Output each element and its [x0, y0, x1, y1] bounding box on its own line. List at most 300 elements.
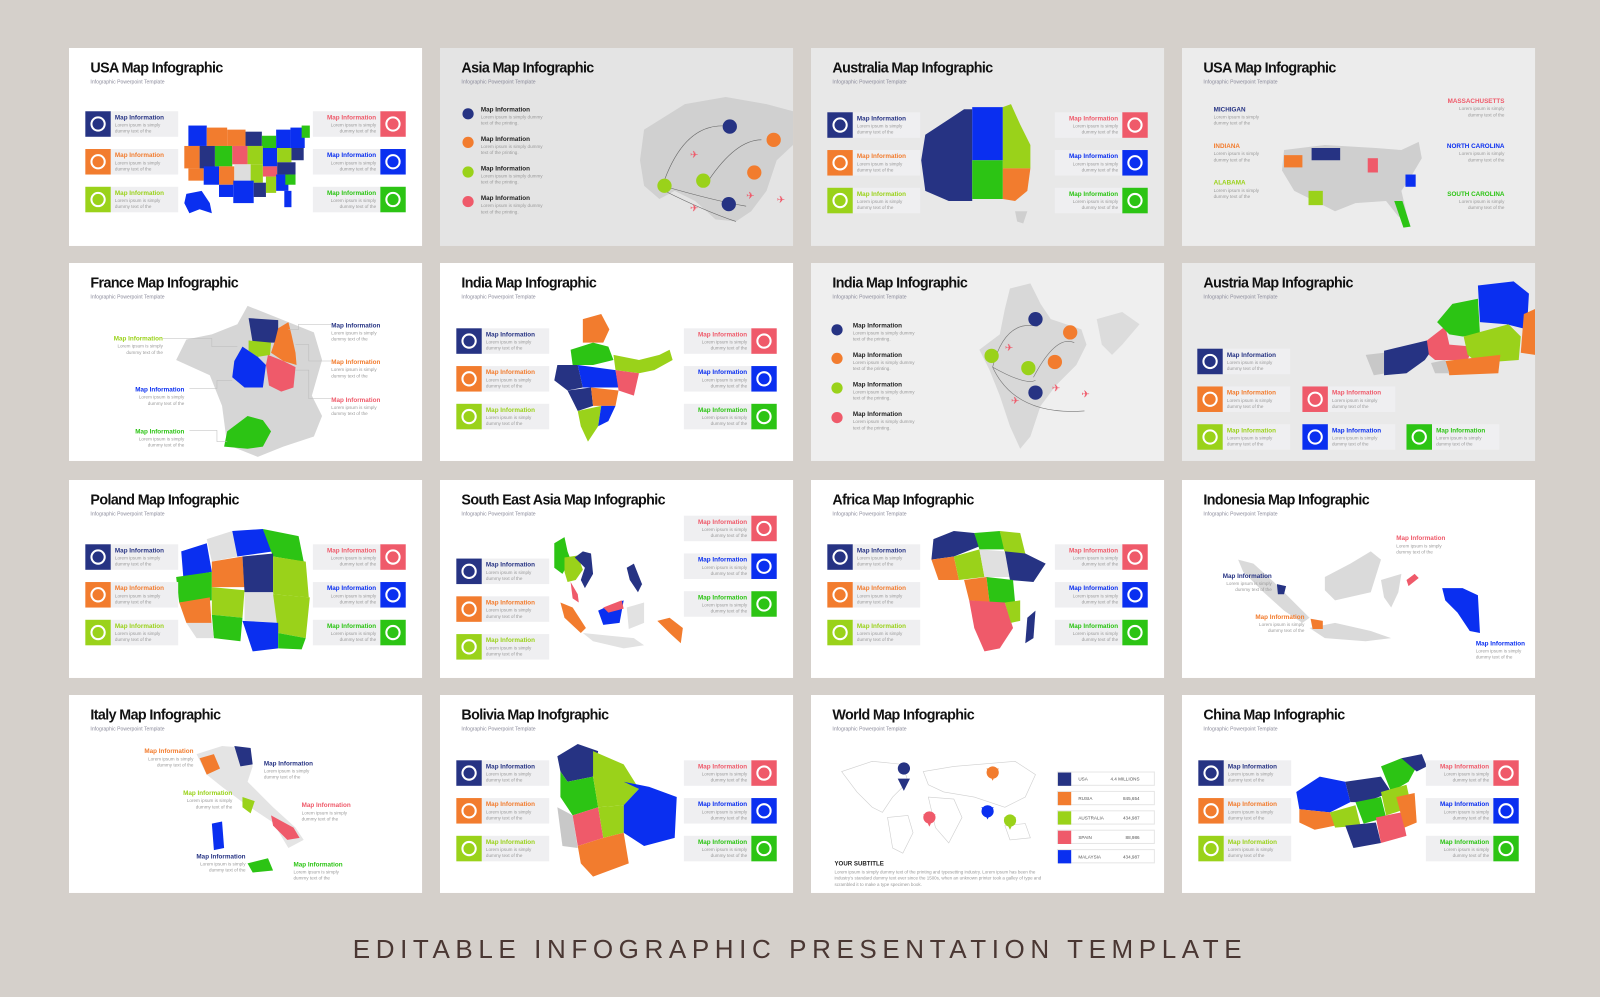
- card: Italy map infographic: Map Information: [293, 861, 343, 868]
- card: South East Asia map infographic: Map Information: [486, 562, 535, 569]
- data table: 4.4 MILLIONS: [1110, 777, 1140, 782]
- card: Australia map infographic: Map Information: [857, 115, 906, 122]
- card: Indonesia map infographic: Map Information: [1476, 640, 1525, 647]
- card: USA states map infographic: MICHIGAN: [1214, 106, 1246, 113]
- card: USA map infographic: Map Information: [327, 190, 376, 197]
- card: India routes infographic: Map Information: [853, 322, 902, 329]
- card: Africa map infographic: dummy text of the: [1082, 561, 1118, 566]
- card: France map infographic: dummy text of the: [148, 442, 184, 447]
- subtitle text block: Lorem ipsum is simply dummy text of the printing and typesetting industry. Lorem ipsum has been the industry's standard dummy text ever since the 1500s, when an unknown printer took a galley of type and scrambled it to make a type specimen book.: [834, 869, 1041, 887]
- card: Bolivia map infographic: Map Information: [698, 801, 747, 808]
- card: Indonesia map infographic: dummy text of the: [1268, 627, 1304, 633]
- info boxes left: [456, 760, 549, 862]
- card: South East Asia map infographic: Lorem ipsum is simply: [702, 565, 747, 570]
- card: South East Asia map infographic: dummy text of the: [711, 533, 747, 538]
- card: India map infographic: dummy text of the: [486, 345, 522, 350]
- card: South East Asia map infographic: Lorem ipsum is simply: [702, 602, 747, 608]
- card: South East Asia map infographic: Map Information: [698, 519, 747, 526]
- map: Asia with routes: ✈: [746, 191, 755, 202]
- info list: [831, 322, 915, 430]
- card: India map infographic: Lorem ipsum is simply: [486, 340, 531, 345]
- card: Africa map infographic: Map Information: [1069, 547, 1118, 554]
- card: Indonesia map infographic: dummy text of the: [1235, 587, 1272, 592]
- card: Italy map infographic: Map Information: [264, 760, 313, 767]
- map: South East Asia: [554, 537, 683, 648]
- card: Africa map infographic: Lorem ipsum is simply: [857, 556, 902, 561]
- card: USA map infographic: dummy text of the: [340, 166, 376, 171]
- card: Indonesia map infographic: Map Information: [1255, 614, 1304, 621]
- card: France map infographic: Lorem ipsum is simply: [331, 330, 377, 335]
- subtitle: Infographic Powerpoint Template: [90, 80, 165, 86]
- card: South East Asia map infographic: Lorem ipsum is simply: [702, 527, 747, 532]
- subtitle: Infographic Powerpoint Template: [461, 295, 536, 301]
- card: Australia map infographic: dummy text of the: [857, 167, 893, 172]
- subtitle: Infographic Powerpoint Template: [90, 512, 165, 518]
- card: India map infographic: dummy text of the: [711, 421, 747, 426]
- subtitle: Infographic Powerpoint Template: [832, 295, 907, 301]
- card: India map infographic: dummy text of the: [711, 383, 747, 388]
- labels: [144, 748, 351, 880]
- info boxes left: [827, 544, 920, 646]
- map: Austria: [1366, 281, 1535, 376]
- card: Poland map infographic: dummy text of the: [115, 637, 151, 642]
- card: France map infographic: Lorem ipsum is simply: [331, 367, 377, 372]
- card: Africa map infographic: Lorem ipsum is simply: [1073, 593, 1118, 598]
- info boxes left: [85, 111, 178, 212]
- map: Bolivia: [557, 744, 677, 877]
- subtitle: Infographic Powerpoint Template: [832, 80, 907, 86]
- subtitle: Infographic Powerpoint Template: [461, 80, 536, 86]
- card: Bolivia map infographic: [440, 695, 793, 893]
- card: Africa map infographic: Map Information: [857, 585, 906, 592]
- card: Asia map infographic: Lorem ipsum is simply dummy: [481, 114, 543, 119]
- card: Bolivia map infographic: Map Information: [486, 839, 535, 846]
- title: World Map Infographic: [832, 706, 974, 723]
- card: Poland map infographic: Lorem ipsum is simply: [115, 556, 160, 561]
- card: Italy map infographic: Lorem ipsum is simply: [148, 756, 193, 761]
- card: India map infographic: Lorem ipsum is simply: [486, 377, 531, 382]
- data table: 845,654: [1123, 796, 1140, 801]
- map: India gray with routes: ✈: [1081, 390, 1090, 401]
- map: France: [163, 306, 332, 457]
- card: USA states map infographic: dummy text of the: [1214, 120, 1250, 125]
- card: Africa map infographic: dummy text of the: [857, 561, 893, 566]
- card: USA map infographic: Lorem ipsum is simply: [331, 122, 376, 128]
- card: Poland map infographic: Map Information: [327, 585, 376, 592]
- card: India map infographic: dummy text of the: [486, 421, 522, 426]
- card: France map infographic: Map Information: [331, 397, 380, 404]
- card: Australia map infographic: Map Information: [857, 191, 906, 198]
- card: USA map infographic: Map Information: [115, 152, 164, 159]
- card: USA states map infographic: Lorem ipsum is simply: [1214, 188, 1259, 193]
- card: World map infographic: [811, 695, 1164, 893]
- card: Austria map infographic: Map Information: [1227, 352, 1276, 359]
- card: Italy map infographic: Lorem ipsum is simply: [293, 869, 339, 875]
- card: France map infographic: dummy text of the: [148, 400, 184, 405]
- map: world outline with pins: [841, 761, 1036, 854]
- info boxes grid: [1197, 348, 1485, 450]
- card: China map infographic: dummy text of the: [1228, 853, 1264, 858]
- card: Italy map infographic: Map Information: [302, 802, 351, 809]
- map: Asia with routes: ✈: [777, 195, 785, 206]
- info boxes right: [684, 760, 777, 862]
- title: Australia Map Infographic: [832, 59, 993, 76]
- card: Poland map infographic: Map Information: [115, 623, 164, 630]
- card: France map infographic: Map Information: [135, 386, 184, 394]
- card: Africa map infographic: dummy text of the: [1082, 637, 1118, 642]
- card: France map infographic: [69, 263, 422, 461]
- card: Indonesia map infographic: Lorem ipsum is simply: [1259, 622, 1304, 627]
- card: Poland map infographic: Map Information: [115, 585, 164, 592]
- card: India map infographic: Lorem ipsum is simply: [486, 415, 531, 420]
- card: India routes infographic: Map Information: [853, 381, 902, 389]
- card: USA map infographic: Lorem ipsum is simply: [115, 198, 160, 203]
- card: China map infographic: Map Information: [1440, 763, 1489, 771]
- info boxes right: [1182, 694, 1535, 696]
- card: India map infographic: dummy text of the: [711, 345, 747, 350]
- card: India routes infographic: text of the printing.: [853, 425, 891, 430]
- labels right: [1447, 98, 1504, 210]
- card: India map infographic: Map Information: [698, 331, 747, 339]
- card: South East Asia map infographic: dummy text of the: [711, 608, 747, 613]
- card: France map infographic: Map Information: [114, 335, 163, 343]
- card: USA map infographic: dummy text of the: [340, 204, 376, 209]
- card: Italy map infographic: Map Information: [183, 790, 232, 797]
- card: USA map infographic: Lorem ipsum is simply: [115, 160, 160, 165]
- card: Asia map infographic: Map Information: [481, 195, 530, 202]
- title: South East Asia Map Infographic: [461, 491, 665, 508]
- card: China map infographic: Lorem ipsum is simply: [1444, 772, 1489, 777]
- card: China map infographic: dummy text of the: [1228, 777, 1264, 782]
- map: India gray with routes: [980, 284, 1140, 448]
- card: USA map infographic: dummy text of the: [115, 128, 151, 133]
- footer caption: EDITABLE INFOGRAPHIC PRESENTATION TEMPLATE: [353, 934, 1247, 964]
- card: India map infographic: Map Information: [698, 407, 747, 414]
- card: Poland map infographic: Map Information: [115, 547, 164, 554]
- data table: USA: [1078, 777, 1088, 782]
- card: Africa map infographic: Map Information: [857, 623, 906, 630]
- card: Italy map infographic: Map Information: [196, 853, 246, 860]
- map: Italy: [196, 746, 304, 872]
- card: India routes infographic: text of the printing.: [853, 395, 891, 400]
- card: USA map infographic: Lorem ipsum is simply: [115, 122, 160, 128]
- subtitle: Infographic Powerpoint Template: [1203, 80, 1278, 86]
- card: Africa map infographic: Lorem ipsum is simply: [1073, 631, 1118, 636]
- card: South East Asia map infographic: Lorem ipsum is simply: [486, 608, 531, 613]
- card: Australia map infographic: Map Information: [1069, 115, 1118, 122]
- card: Austria map infographic: dummy text of the: [1227, 366, 1263, 371]
- card: Austria map infographic: Lorem ipsum is simply: [1332, 435, 1377, 441]
- card: USA map infographic: Map Information: [115, 114, 164, 121]
- card: South East Asia map infographic: Lorem ipsum is simply: [486, 645, 531, 650]
- card: Asia map infographic: Lorem ipsum is simply dummy: [481, 203, 543, 208]
- subtitle: Infographic Powerpoint Template: [461, 727, 536, 733]
- card: Asia map infographic: text of the printing.: [481, 209, 519, 214]
- map: Australia: [921, 104, 1030, 224]
- card: USA map infographic: Map Information: [327, 114, 376, 121]
- card: China map infographic: Map Information: [1440, 801, 1489, 808]
- info boxes right: [684, 516, 777, 617]
- card: Austria map infographic: dummy text of the: [1436, 441, 1473, 446]
- card: USA states map infographic: ALABAMA: [1214, 180, 1246, 187]
- card: India routes infographic: Lorem ipsum is simply dummy: [853, 390, 915, 395]
- card: France map infographic: Lorem ipsum is simply: [139, 395, 184, 400]
- card: Asia map infographic: [440, 48, 793, 246]
- card: France map infographic: dummy text of the: [331, 373, 368, 378]
- card: Australia map infographic: dummy text of the: [1082, 129, 1118, 134]
- card: China map infographic: [1182, 695, 1535, 893]
- card: China map infographic: Map Information: [1440, 839, 1489, 846]
- card: Bolivia map infographic: Lorem ipsum is simply: [486, 847, 531, 852]
- card: Australia map infographic: Lorem ipsum is simply: [857, 161, 902, 166]
- map: USA: [184, 126, 310, 214]
- card: India map infographic: Lorem ipsum is simply: [702, 415, 747, 420]
- map: India gray with routes: ✈: [1005, 343, 1013, 354]
- card: Australia map infographic: dummy text of the: [1082, 167, 1118, 172]
- card: Poland map infographic: [69, 480, 422, 678]
- card: Asia map infographic: Lorem ipsum is simply dummy: [481, 144, 543, 149]
- subtitle: Infographic Powerpoint Template: [90, 295, 165, 301]
- title: Italy Map Infographic: [90, 706, 220, 723]
- title: Bolivia Map Inofgraphic: [461, 706, 608, 723]
- card: India map infographic: Map Information: [486, 369, 535, 376]
- card: Poland map infographic: dummy text of the: [340, 599, 376, 604]
- card: Africa map infographic: dummy text of the: [857, 637, 893, 642]
- card: Australia map infographic: dummy text of the: [857, 205, 893, 210]
- data table: AUSTRALIA: [1078, 815, 1104, 821]
- card: South East Asia map infographic: [440, 480, 793, 678]
- card: Bolivia map infographic: Lorem ipsum is simply: [486, 809, 531, 814]
- card: Australia map infographic: Lorem ipsum is simply: [857, 124, 902, 129]
- card: Africa map infographic: Lorem ipsum is simply: [857, 631, 902, 636]
- card: Austria map infographic: Lorem ipsum is simply: [1227, 360, 1272, 365]
- card: Italy map infographic: [69, 695, 422, 893]
- card: China map infographic: Lorem ipsum is simply: [1228, 772, 1273, 777]
- card: China map infographic: Lorem ipsum is simply: [1444, 809, 1489, 814]
- card: USA states map infographic: Lorem ipsum is simply: [1459, 151, 1504, 156]
- card: Poland map infographic: Lorem ipsum is simply: [331, 593, 376, 598]
- card: Australia map infographic: Map Information: [1069, 191, 1118, 198]
- card: USA states map infographic: Lorem ipsum is simply: [1459, 199, 1504, 204]
- card: Poland map infographic: Lorem ipsum is simply: [331, 556, 376, 561]
- card: Bolivia map infographic: Lorem ipsum is simply: [702, 847, 747, 852]
- subtitle text block: [834, 861, 1041, 887]
- card: China map infographic: dummy text of the: [1453, 777, 1489, 782]
- card: USA states map infographic: Lorem ipsum is simply: [1214, 151, 1259, 156]
- card: USA states map infographic: Lorem ipsum is simply: [1214, 114, 1259, 119]
- card: France map infographic: Lorem ipsum is simply: [117, 344, 163, 349]
- card: USA states map infographic: SOUTH CAROLINA: [1447, 191, 1504, 198]
- card: Poland map infographic: dummy text of the: [115, 599, 151, 604]
- card: Australia map infographic: Lorem ipsum is simply: [1073, 124, 1118, 129]
- card: Italy map infographic: Map Information: [144, 748, 193, 755]
- card: France map infographic: Map Information: [331, 359, 380, 366]
- card: Bolivia map infographic: dummy text of the: [711, 815, 747, 820]
- card: India routes infographic: Lorem ipsum is simply dummy: [853, 330, 915, 335]
- map: Africa: [931, 531, 1046, 652]
- card: Asia map infographic: text of the printing.: [481, 120, 519, 125]
- card: China map infographic: dummy text of the: [1228, 815, 1264, 820]
- card: USA states map infographic: dummy text of the: [1468, 157, 1504, 162]
- map: Indonesia: [1238, 552, 1480, 642]
- card: Africa map infographic: Map Information: [857, 547, 906, 554]
- title: USA Map Infographic: [1203, 59, 1336, 76]
- subtitle text block: YOUR SUBTITLE: [834, 861, 884, 867]
- title: China Map Infographic: [1203, 706, 1345, 723]
- info boxes right: [1055, 544, 1148, 646]
- card: Italy map infographic: Lorem ipsum is simply: [302, 810, 347, 815]
- subtitle: Infographic Powerpoint Template: [1203, 512, 1278, 518]
- card: Bolivia map infographic: Map Information: [698, 763, 747, 771]
- card: France map infographic: Lorem ipsum is simply: [331, 405, 377, 410]
- card: Bolivia map infographic: Lorem ipsum is simply: [702, 772, 747, 777]
- card: France map infographic: dummy text of the: [126, 349, 163, 354]
- card: Bolivia map infographic: Map Information: [698, 839, 747, 846]
- card: South East Asia map infographic: dummy text of the: [486, 575, 522, 581]
- card: USA map infographic: Map Information: [115, 190, 164, 197]
- card: Indonesia map infographic: Lorem ipsum is simply: [1226, 581, 1272, 586]
- card: USA map infographic: [69, 48, 422, 246]
- labels left: [1214, 106, 1259, 199]
- card: Indonesia map infographic: Lorem ipsum is simply: [1396, 543, 1442, 548]
- card: Asia map infographic: text of the printing.: [481, 179, 519, 184]
- card: Indonesia map infographic: dummy text of the: [1396, 549, 1433, 554]
- title: Austria Map Infographic: [1203, 274, 1353, 291]
- card: South East Asia map infographic: dummy text of the: [711, 570, 747, 575]
- card: China map infographic: Map Information: [1228, 839, 1277, 846]
- title: Asia Map Infographic: [461, 59, 594, 76]
- card: China map infographic: Lorem ipsum is simply: [1228, 847, 1273, 852]
- card: India map infographic: [440, 263, 793, 461]
- subtitle: Infographic Powerpoint Template: [832, 512, 907, 518]
- card: Bolivia map infographic: Lorem ipsum is simply: [486, 772, 531, 777]
- card: Italy map infographic: dummy text of the: [157, 762, 193, 767]
- card: China map infographic: dummy text of the: [1453, 853, 1489, 858]
- card: Africa map infographic: dummy text of the: [857, 599, 893, 604]
- info boxes left: [85, 544, 178, 646]
- card: USA states map infographic: NORTH CAROLINA: [1447, 143, 1504, 150]
- card: South East Asia map infographic: Lorem ipsum is simply: [486, 570, 531, 575]
- card: USA states map infographic: dummy text of the: [1214, 193, 1250, 199]
- card: Bolivia map infographic: Lorem ipsum is simply: [702, 809, 747, 814]
- info boxes left: [456, 328, 549, 430]
- data table: 434,987: [1123, 854, 1140, 859]
- title: France Map Infographic: [90, 274, 238, 291]
- card: Indonesia map infographic: Map Information: [1223, 573, 1272, 580]
- card: South East Asia map infographic: Map Information: [698, 557, 747, 564]
- card: India routes infographic: text of the printing.: [853, 336, 891, 341]
- card: Poland map infographic: dummy text of the: [340, 561, 376, 566]
- card: Italy map infographic: dummy text of the: [302, 816, 338, 821]
- subtitle: Infographic Powerpoint Template: [1203, 295, 1278, 301]
- card: South East Asia map infographic: Map Information: [486, 637, 535, 644]
- title: India Map Infographic: [832, 274, 967, 291]
- card: Austria map infographic: Map Information: [1332, 390, 1381, 397]
- card: South East Asia map infographic: dummy text of the: [486, 651, 522, 656]
- card: Austria map infographic: Map Information: [1227, 390, 1276, 397]
- subtitle: Infographic Powerpoint Template: [832, 727, 907, 733]
- card: India routes infographic: Map Information: [853, 352, 902, 359]
- card: India map infographic: Map Information: [698, 369, 747, 376]
- title: Indonesia Map Infographic: [1203, 491, 1369, 508]
- card: India routes infographic: [811, 263, 1164, 461]
- card: USA states map infographic: INDIANA: [1214, 143, 1240, 150]
- card: France map infographic: dummy text of the: [331, 336, 368, 341]
- card: Bolivia map infographic: dummy text of the: [711, 853, 747, 858]
- card: Australia map infographic: dummy text of the: [1082, 205, 1118, 210]
- card: India map infographic: Map Information: [486, 407, 535, 414]
- card: Australia map infographic: Map Information: [857, 153, 906, 160]
- card: Africa map infographic: Map Information: [1069, 585, 1118, 592]
- card: Indonesia map infographic: dummy text of the: [1476, 654, 1512, 659]
- card: USA map infographic: Lorem ipsum is simply: [331, 160, 376, 165]
- info boxes right: [313, 111, 406, 212]
- card: Australia map infographic: Lorem ipsum is simply: [1073, 161, 1118, 166]
- data table: SPAIN: [1078, 835, 1092, 840]
- card: Indonesia map infographic: [1182, 480, 1535, 678]
- card: Austria map infographic: Map Information: [1436, 427, 1485, 434]
- card: China map infographic: Lorem ipsum is simply: [1444, 847, 1489, 852]
- title: Africa Map Infographic: [832, 491, 974, 508]
- map: Asia with routes: [640, 97, 793, 222]
- card: India map infographic: dummy text of the: [486, 383, 522, 388]
- title: Poland Map Infographic: [90, 491, 239, 508]
- card: Austria map infographic: Map Information: [1332, 427, 1381, 434]
- map: India: [554, 314, 673, 442]
- labels: [114, 322, 380, 448]
- card: Italy map infographic: Lorem ipsum is simply: [200, 861, 246, 866]
- card: Asia map infographic: Lorem ipsum is simply dummy: [481, 174, 543, 179]
- data table: 434,987: [1123, 815, 1140, 821]
- card: Australia map infographic: dummy text of the: [857, 129, 893, 134]
- card: Poland map infographic: Map Information: [327, 547, 376, 554]
- card: France map infographic: Map Information: [135, 428, 184, 435]
- card: Indonesia map infographic: Map Information: [1396, 535, 1445, 542]
- card: USA states map infographic: [1182, 48, 1535, 246]
- card: USA states map infographic: MASSACHUSETTS: [1448, 98, 1504, 105]
- card: USA map infographic: dummy text of the: [115, 166, 151, 171]
- card: India routes infographic: text of the printing.: [853, 366, 891, 371]
- card: Austria map infographic: dummy text of the: [1332, 441, 1368, 446]
- card: Italy map infographic: Lorem ipsum is simply: [264, 768, 309, 774]
- card: India routes infographic: Lorem ipsum is simply dummy: [853, 419, 915, 424]
- subtitle: Infographic Powerpoint Template: [1203, 727, 1278, 733]
- data table: MALAYSIA: [1078, 854, 1101, 859]
- card: China map infographic: Lorem ipsum is simply: [1228, 809, 1273, 814]
- card: Asia map infographic: Map Information: [481, 136, 530, 143]
- card: Austria map infographic: [1182, 263, 1535, 461]
- card: Poland map infographic: Lorem ipsum is simply: [331, 631, 376, 636]
- card: Australia map infographic: Lorem ipsum is simply: [857, 199, 902, 204]
- card: Africa map infographic: [811, 480, 1164, 678]
- card: Africa map infographic: Lorem ipsum is simply: [857, 593, 902, 598]
- card: France map infographic: dummy text of the: [331, 410, 368, 416]
- data table: RUSIA: [1078, 796, 1092, 801]
- card: Asia map infographic: Map Information: [481, 165, 530, 172]
- card: Poland map infographic: dummy text of the: [340, 637, 376, 642]
- card: USA map infographic: dummy text of the: [115, 204, 151, 209]
- map: Asia with routes: ✈: [690, 150, 699, 161]
- info boxes right: [1055, 112, 1148, 214]
- card: China map infographic: dummy text of the: [1453, 815, 1489, 820]
- map: China: [1296, 754, 1426, 848]
- card: Austria map infographic: dummy text of the: [1332, 403, 1368, 408]
- map: USA gray with states: [1282, 142, 1422, 228]
- card: Bolivia map infographic: dummy text of the: [486, 815, 522, 820]
- card: USA states map infographic: dummy text of the: [1468, 205, 1504, 210]
- card: China map infographic: Map Information: [1228, 763, 1277, 771]
- card: Italy map infographic: dummy text of the: [196, 804, 232, 809]
